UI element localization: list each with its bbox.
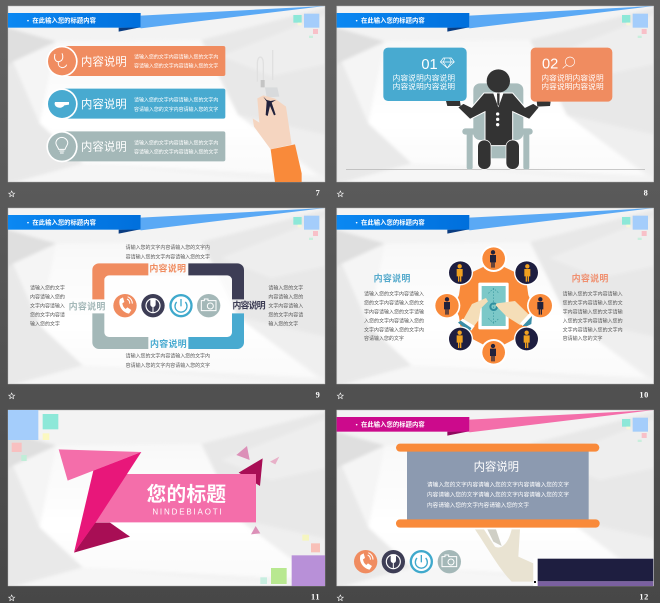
box 02: 02 — [542, 56, 558, 72]
row 1: orange: 请输入您的文字内容请输入您的文字内 — [134, 53, 218, 60]
slide 10 background — [330, 208, 660, 388]
text top: 请输入您的文字内容请输入您的文字内 — [126, 244, 210, 251]
right text block: 请输入您的文字内容请输入 — [563, 290, 623, 297]
slide 9 footer — [9, 390, 321, 399]
slide 9: four-sided frame — [1, 208, 331, 399]
text right: 内容请输入您的 — [268, 294, 303, 301]
text top — [126, 244, 210, 260]
row 1: orange — [46, 46, 225, 77]
grey panel: 请输入您的文字内容请输入您的文字内容请输入您的文字 — [427, 480, 569, 488]
left text block — [364, 272, 424, 342]
slide 7: three content rows with hand — [1, 6, 331, 197]
text bottom: 请输入您的文字内容请输入您的文字内 — [126, 353, 210, 360]
slide 10 header: 在此输入您的标题内容 — [361, 218, 425, 227]
right text block: 入您的文字内容请输入您的 — [563, 317, 623, 324]
slide 10 header — [337, 208, 654, 240]
icon: magnifier — [563, 57, 575, 68]
hand under panel — [475, 529, 533, 582]
people circles — [434, 245, 554, 366]
text bottom: 容请输入您的文字内容请输入您的文字 — [126, 362, 210, 369]
grey panel — [407, 451, 589, 520]
slide 11 background — [1, 410, 331, 590]
right text block: 字内容请输入您的文字请输 — [563, 309, 623, 316]
icons row — [113, 294, 220, 317]
title: 您的标题 — [147, 484, 226, 506]
slide 12 header: 在此输入您的标题内容 — [361, 420, 425, 429]
frame labels: 内容说明 — [69, 300, 105, 311]
left text block: 内容说明 — [374, 272, 410, 283]
origami Z ribbon — [59, 449, 256, 553]
text bottom — [126, 353, 210, 369]
right text block: 容请输入您的文字 — [563, 335, 603, 342]
hand holding tool — [253, 50, 302, 182]
row 3: grey: 请输入您的文字内容请输入您的文字内 — [134, 139, 218, 146]
row 2: blue — [46, 88, 225, 120]
frame labels: 内容说明 — [150, 338, 187, 349]
slide 11 footer — [9, 592, 320, 601]
box 01: 01 — [421, 57, 438, 73]
row 3: grey: 内容说明 — [81, 140, 127, 154]
right text block: 文字内容请输入您的文字内 — [563, 326, 623, 333]
orange gear — [454, 267, 533, 345]
icon: light bulb — [56, 137, 68, 153]
slide 10 footer: 10 — [639, 390, 649, 399]
slide 7 header — [8, 6, 325, 38]
orange top bar — [396, 444, 599, 452]
icons row — [354, 550, 461, 573]
slide 12 footer: 12 — [639, 592, 649, 601]
tablet and hands — [458, 283, 532, 332]
frame labels — [69, 263, 266, 349]
icon: diamond — [440, 58, 454, 68]
slide 8: business person — [330, 6, 660, 197]
slide 8 footer — [337, 188, 649, 197]
slide 12 header — [337, 410, 654, 442]
box 02: 内容说明内容说明 — [541, 81, 604, 91]
right text block — [563, 272, 623, 342]
slide 12 footer — [337, 592, 649, 601]
slide 9 footer: 9 — [316, 390, 321, 399]
text right: 输入您的文字 — [268, 321, 298, 328]
slide 7 background — [1, 6, 331, 186]
orange bottom bar — [396, 519, 600, 528]
text right — [268, 284, 303, 328]
grey panel: 内容说明 — [474, 459, 519, 473]
left text block: 您的文字内容请输入您的文 — [364, 300, 424, 307]
row 1: orange: 容请输入您的文字内容请输入您的文字 — [134, 63, 218, 70]
icon: stethoscope — [55, 53, 67, 68]
slide 9 header: 在此输入您的标题内容 — [32, 218, 97, 227]
text left: 您的文字内容请 — [30, 312, 65, 319]
frame labels: 内容说明 — [149, 263, 186, 274]
icon: whistle — [55, 102, 69, 108]
left text block: 文字内容请输入您的文字内 — [364, 326, 424, 333]
slide 10: tablet and people — [330, 208, 660, 399]
frame labels: 内容说明 — [232, 300, 266, 311]
box 01 — [383, 48, 467, 101]
text left: 内容请输入您的 — [30, 294, 65, 301]
left text block: 请输入您的文字内容请输入 — [364, 290, 424, 297]
text left: 请输入您的文字 — [30, 284, 65, 291]
slide 11 footer: 11 — [311, 592, 320, 601]
text right: 您的文字内容请 — [268, 312, 303, 319]
slide 9 header — [8, 208, 325, 240]
ground line — [346, 168, 645, 170]
right text block: 内容说明 — [572, 272, 608, 283]
subtitle: NINDEBIAOTI — [152, 508, 222, 517]
left text block: 容请输入您的文字 — [364, 335, 404, 342]
grey panel: 内容请输入您的文字请输入您的文字内容请输入您的文字 — [427, 491, 569, 499]
navy box — [533, 558, 653, 586]
grey panel: 内容请输入您的文字内容请输入您的文字 — [427, 501, 529, 509]
slide 7 footer: 7 — [316, 188, 321, 197]
small triangles — [236, 446, 279, 534]
slide 8 header — [337, 6, 654, 38]
text left: 文字内容请输入 — [30, 303, 65, 310]
row 2: blue: 内容说明 — [81, 97, 127, 111]
right text block: 您的文字内容请输入您的文 — [563, 300, 623, 307]
slide 10 footer — [337, 390, 649, 399]
box 02 — [531, 48, 612, 102]
corner squares bottom right — [260, 535, 325, 586]
slide 8 header: 在此输入您的标题内容 — [361, 16, 425, 25]
row 2: blue: 容请输入您的文字内容请输入您的文字 — [134, 106, 218, 113]
row 3: grey — [46, 131, 225, 162]
text right: 请输入您的文字 — [268, 284, 303, 291]
left text block: 入您的文字内容请输入您的 — [364, 317, 424, 324]
slide 8 footer: 8 — [644, 188, 649, 197]
person in chair — [446, 69, 551, 169]
slide 8 background — [330, 6, 660, 186]
slide 9 background — [1, 208, 331, 388]
box 01: 内容说明内容说明 — [393, 81, 455, 91]
slide 11: section title — [1, 410, 331, 601]
text top: 容请输入您的文字内容请输入您的文字 — [126, 253, 210, 260]
frame — [92, 263, 244, 349]
text left — [30, 284, 65, 328]
text left: 输入您的文字 — [30, 321, 60, 328]
slide 7 header: 在此输入您的标题内容 — [32, 16, 97, 25]
row 1: orange: 内容说明 — [81, 54, 127, 68]
text right: 文字内容请输入 — [268, 303, 303, 310]
box 01: 内容说明内容说明 — [393, 72, 455, 82]
slide 12: content panel — [330, 410, 660, 601]
slide 12 background — [330, 410, 660, 590]
corner squares top left — [8, 410, 58, 461]
slide 7 footer — [9, 188, 321, 197]
row 2: blue: 请输入您的文字内容请输入您的文字内 — [134, 97, 218, 104]
row 3: grey: 容请输入您的文字内容请输入您的文字 — [134, 149, 218, 156]
box 02: 内容说明内容说明 — [541, 72, 604, 82]
left text block: 字内容请输入您的文字请输 — [364, 309, 424, 316]
